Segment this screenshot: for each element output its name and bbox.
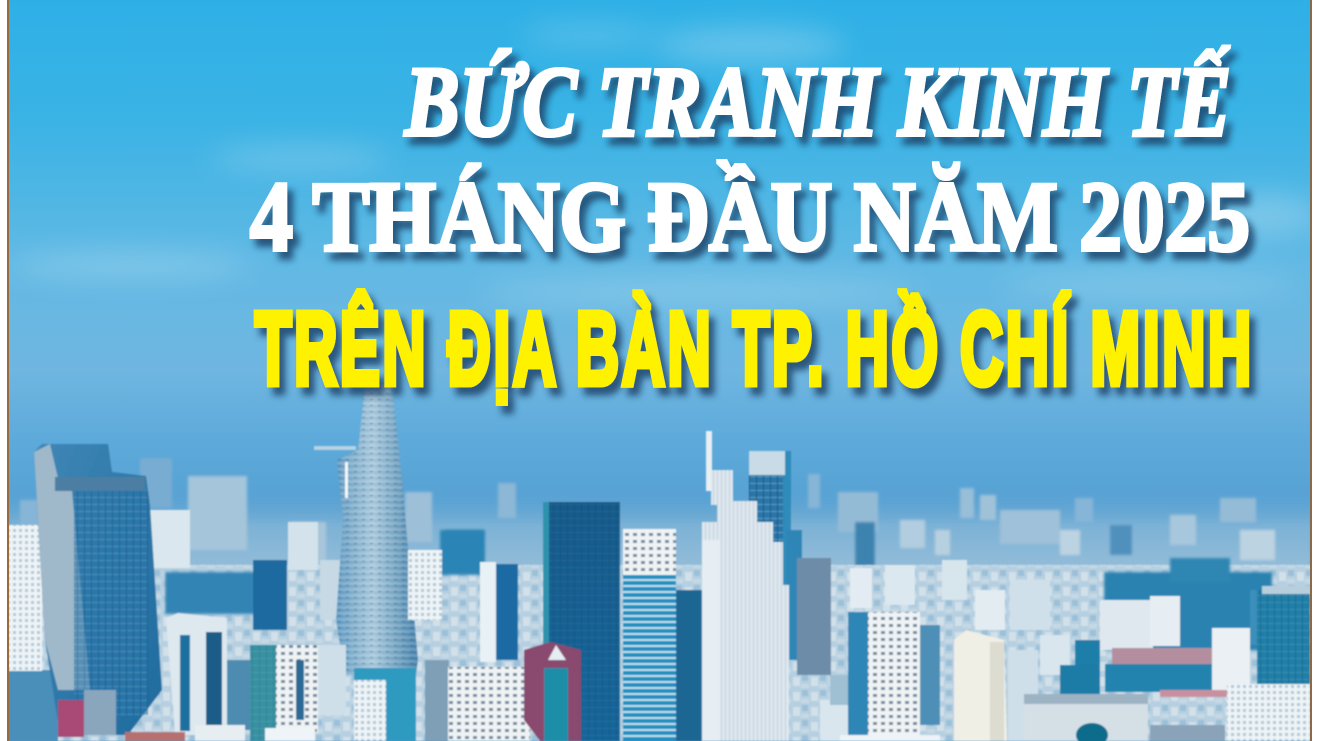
building: large glass tower	[34, 444, 162, 737]
mid city blocks	[8, 510, 1311, 741]
city skyline photo	[8, 385, 1311, 741]
building: cream hotel	[954, 630, 1007, 741]
building: right white block	[1024, 628, 1310, 741]
distant hazy skyline	[8, 458, 1311, 610]
building: Landmark 81 tower	[702, 431, 802, 741]
building: blue and white office	[253, 550, 518, 662]
title	[250, 46, 1254, 406]
building: right teal tower	[1257, 586, 1310, 690]
building: far left white tower	[8, 525, 42, 671]
building: dark blue bank tower	[543, 502, 620, 741]
building: striped tower	[623, 529, 702, 741]
building: Bitexco tower	[314, 385, 418, 675]
building: grey office beside Landmark	[797, 558, 831, 675]
foreground low-rise buildings	[125, 613, 581, 741]
building: right white office	[840, 612, 940, 741]
